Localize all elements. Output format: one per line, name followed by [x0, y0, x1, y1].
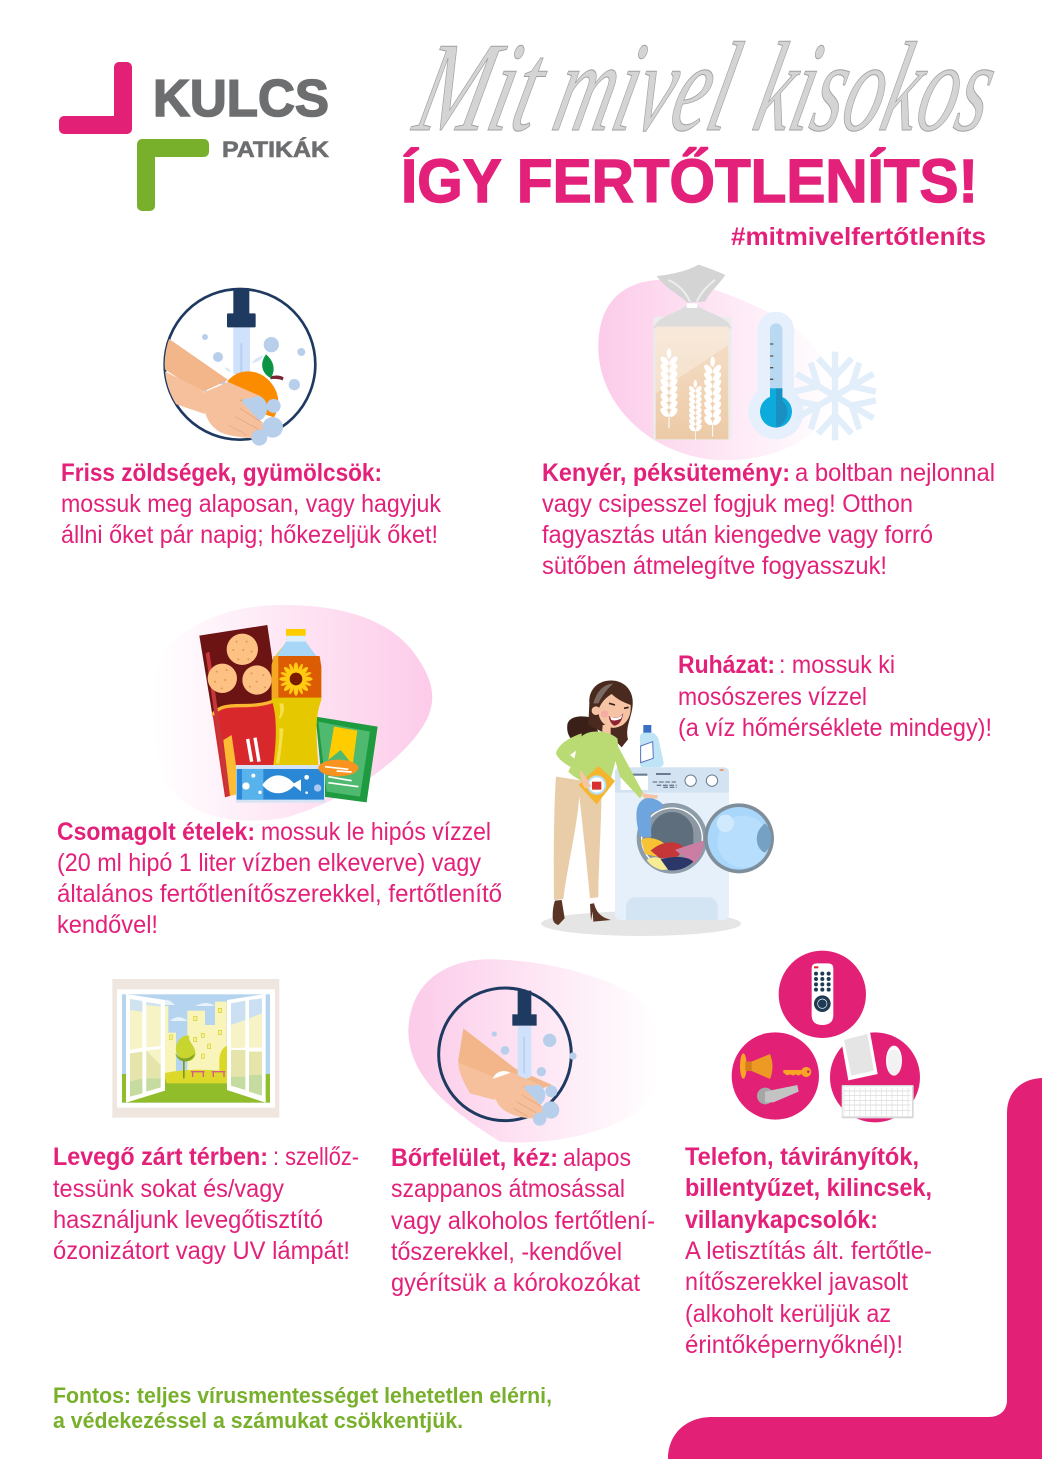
panel: skin text: vagy alkoholos fertőtlení-	[391, 1207, 655, 1235]
panel: air text: ózonizátort vagy UV lámpát!	[53, 1237, 350, 1265]
panel: bread text: vagy csipesszel fogjuk meg! Otthon	[542, 490, 913, 518]
panel: fresh vegetables text: Friss zöldségek, gyümölcsök:	[61, 459, 382, 487]
panel: skin text: alapos	[563, 1144, 631, 1172]
panel: clothing text	[678, 651, 992, 742]
panel: air text: Levegő zárt térben:	[53, 1143, 268, 1171]
panel: air text: használjunk levegőtisztító	[53, 1206, 323, 1234]
icon: hand washing under tap	[408, 959, 657, 1143]
panel: fresh vegetables text	[61, 459, 441, 549]
script title	[403, 17, 1010, 159]
hashtag: #mitmivelfertőtleníts	[731, 223, 986, 251]
logo mark: green corner	[137, 139, 209, 211]
script title: Mit	[403, 17, 561, 159]
logo wordmark: PATIKÁK	[222, 137, 329, 162]
icon: washing fruit under tap	[163, 288, 315, 446]
panel: devices text: Telefon, távirányítók,	[685, 1143, 919, 1171]
logo mark: pink corner	[59, 62, 132, 134]
panel: air text	[53, 1143, 359, 1265]
panel: air text: : szellőz-	[273, 1143, 359, 1171]
logo wordmark	[153, 70, 329, 162]
icon: open window	[112, 979, 279, 1118]
panel: bread text: sütőben átmelegítve fogyasszuk!	[542, 552, 887, 580]
panel: devices text	[685, 1143, 932, 1359]
panel: devices text: billentyűzet, kilincsek,	[685, 1174, 932, 1202]
panel: fresh vegetables text: állni őket pár napig; hőkezeljük őket!	[61, 521, 438, 549]
panel: skin text	[391, 1144, 655, 1297]
footer note	[53, 1383, 552, 1433]
panel: packaged food text: általános fertőtlenítőszerekkel, fertőtlenítő	[57, 880, 502, 908]
panel: bread text	[542, 459, 995, 580]
icon: remote, door handles and keyboard	[732, 951, 920, 1122]
panel: devices text: (alkoholt kerüljük az	[685, 1300, 891, 1328]
icon: woman at washing machine	[541, 681, 774, 936]
panel: packaged food text: (20 ml hipó 1 liter vízben elkeverve) vagy	[57, 849, 481, 877]
panel: devices text: A letisztítás ált. fertőtle-	[685, 1237, 932, 1265]
panel: fresh vegetables text: mossuk meg alaposan, vagy hagyjuk	[61, 490, 441, 518]
panel: packaged food text: mossuk le hipós vízzel	[261, 818, 491, 846]
panel: bread text: a boltban nejlonnal	[795, 459, 995, 487]
panel: skin text: gyérítsük a kórokozókat	[391, 1269, 640, 1297]
panel: clothing text: Ruházat:	[678, 651, 775, 679]
panel: air text: tessünk sokat és/vagy	[53, 1175, 284, 1203]
panel: packaged food text: Csomagolt ételek:	[57, 818, 255, 846]
panel: devices text: villanykapcsolók:	[685, 1206, 878, 1234]
panel: bread text: fagyasztás után kiengedve vagy forró	[542, 521, 933, 549]
panel: skin text: Bőrfelület, kéz:	[391, 1144, 558, 1172]
icon: packaged foods	[152, 605, 432, 821]
panel: clothing text: (a víz hőmérséklete mindegy)!	[678, 714, 992, 742]
panel: bread text: Kenyér, péksütemény:	[542, 459, 790, 487]
panel: devices text: nítőszerekkel javasolt	[685, 1268, 908, 1296]
panel: devices text: érintőképernyőknél)!	[685, 1331, 903, 1359]
panel: skin text: tőszerekkel, -kendővel	[391, 1238, 622, 1266]
icon: bread, thermometer and snowflake	[598, 265, 882, 460]
panel: packaged food text: kendővel!	[57, 911, 158, 939]
panel: clothing text: mosószeres vízzel	[678, 683, 867, 711]
corner frame	[668, 1078, 1042, 1459]
main heading: ÍGY FERTŐTLENÍTS!	[401, 147, 978, 215]
logo: Kulcs Patikák	[59, 62, 329, 211]
logo wordmark: KULCS	[153, 70, 329, 128]
panel: clothing text: : mossuk ki	[779, 651, 895, 679]
footer note: Fontos: teljes vírusmentességet lehetetlen elérni,	[53, 1383, 552, 1408]
footer note: a védekezéssel a számukat csökkentjük.	[53, 1408, 463, 1433]
panel: skin text: szappanos átmosással	[391, 1175, 625, 1203]
script title: mivel	[542, 17, 753, 159]
panel: packaged food text	[57, 818, 502, 939]
